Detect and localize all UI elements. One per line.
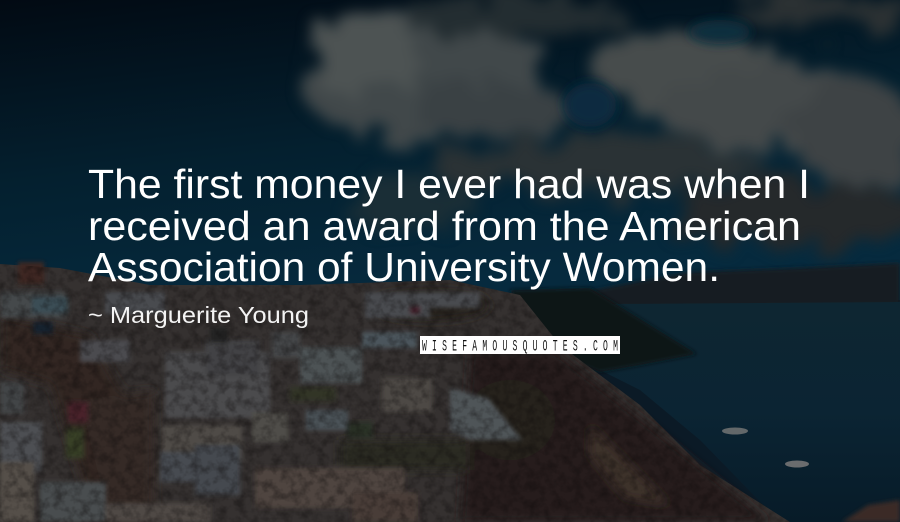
- background: hillside town: [0, 264, 790, 522]
- background: dark headland: [510, 288, 697, 372]
- quote line 1: The first money I ever had was when I: [88, 161, 810, 207]
- background: sea: [600, 302, 900, 522]
- watermark text: WISEFAMOUSQUOTES.COM: [422, 338, 618, 356]
- background: sky: [0, 0, 900, 300]
- background: clouds: [305, 0, 900, 247]
- quote line 3: Association of University Women.: [88, 244, 720, 290]
- boat: [722, 428, 748, 434]
- background: corner rocks: [842, 500, 900, 522]
- quote line 2: received an award from the American: [88, 203, 801, 249]
- quote text: [88, 161, 810, 290]
- background: distant ridge: [540, 263, 900, 308]
- watermark badge: [420, 336, 620, 356]
- background: town texture: [0, 260, 800, 522]
- background: boats: [722, 428, 809, 468]
- background: cliff rock: [0, 289, 770, 522]
- second boat: [785, 460, 809, 468]
- background: white houses: [0, 262, 522, 522]
- background: sky gaps between clouds: [564, 20, 750, 127]
- author attribution: ~ Marguerite Young: [88, 302, 309, 328]
